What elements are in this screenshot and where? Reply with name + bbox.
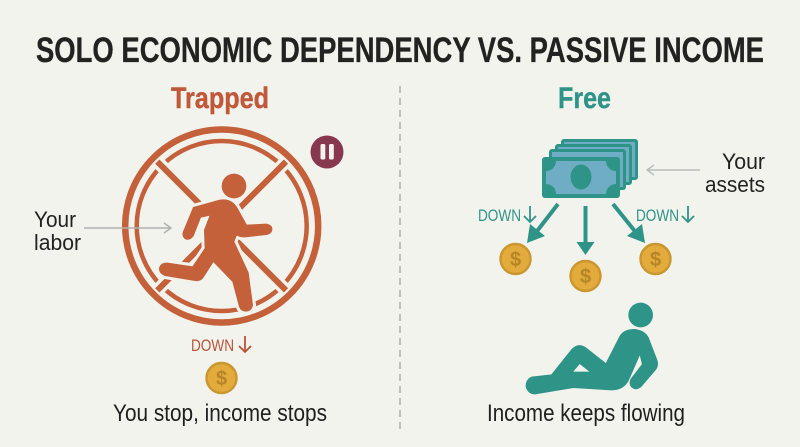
icon: coin, centre: $	[580, 266, 591, 288]
icon: reclining person	[526, 303, 657, 394]
label: your assets: Your	[722, 149, 765, 174]
icon: coin, trapped: $	[216, 368, 227, 390]
label: your labor: Your	[34, 207, 76, 232]
icon: coin, right: $	[650, 249, 661, 271]
icon: coin, trapped	[206, 363, 236, 393]
icon: stack of bills	[542, 139, 638, 198]
label: down, trapped: DOWN	[191, 336, 234, 355]
label: your assets: assets	[705, 172, 765, 197]
heading: Free: Free	[558, 82, 611, 115]
label: your labor: labor	[34, 230, 81, 255]
hole under the bent knee	[573, 364, 589, 372]
caption: income keeps flowing: Income keeps flowing	[487, 400, 685, 427]
icon: coin, left	[500, 244, 530, 274]
label: your assets	[705, 149, 765, 197]
label: your labor	[34, 207, 81, 255]
icon: pause button	[310, 136, 344, 168]
arrow: assets pointer	[647, 165, 700, 175]
heading: Trapped: Trapped	[171, 82, 269, 115]
label: down, right: DOWN	[636, 206, 679, 225]
icon: coin, left: $	[510, 249, 521, 271]
arrows: bills to coins	[527, 204, 645, 255]
icon: running person	[159, 174, 272, 311]
label: down, left: DOWN	[478, 206, 521, 225]
icon: coin, centre	[570, 261, 600, 291]
arrow: labor pointer	[84, 223, 171, 233]
panel: trapped runner wheel	[125, 130, 318, 322]
icon: prohibition wheel	[125, 130, 318, 322]
icon: coin, right	[640, 244, 670, 274]
caption: you stop: You stop, income stops	[113, 400, 327, 427]
